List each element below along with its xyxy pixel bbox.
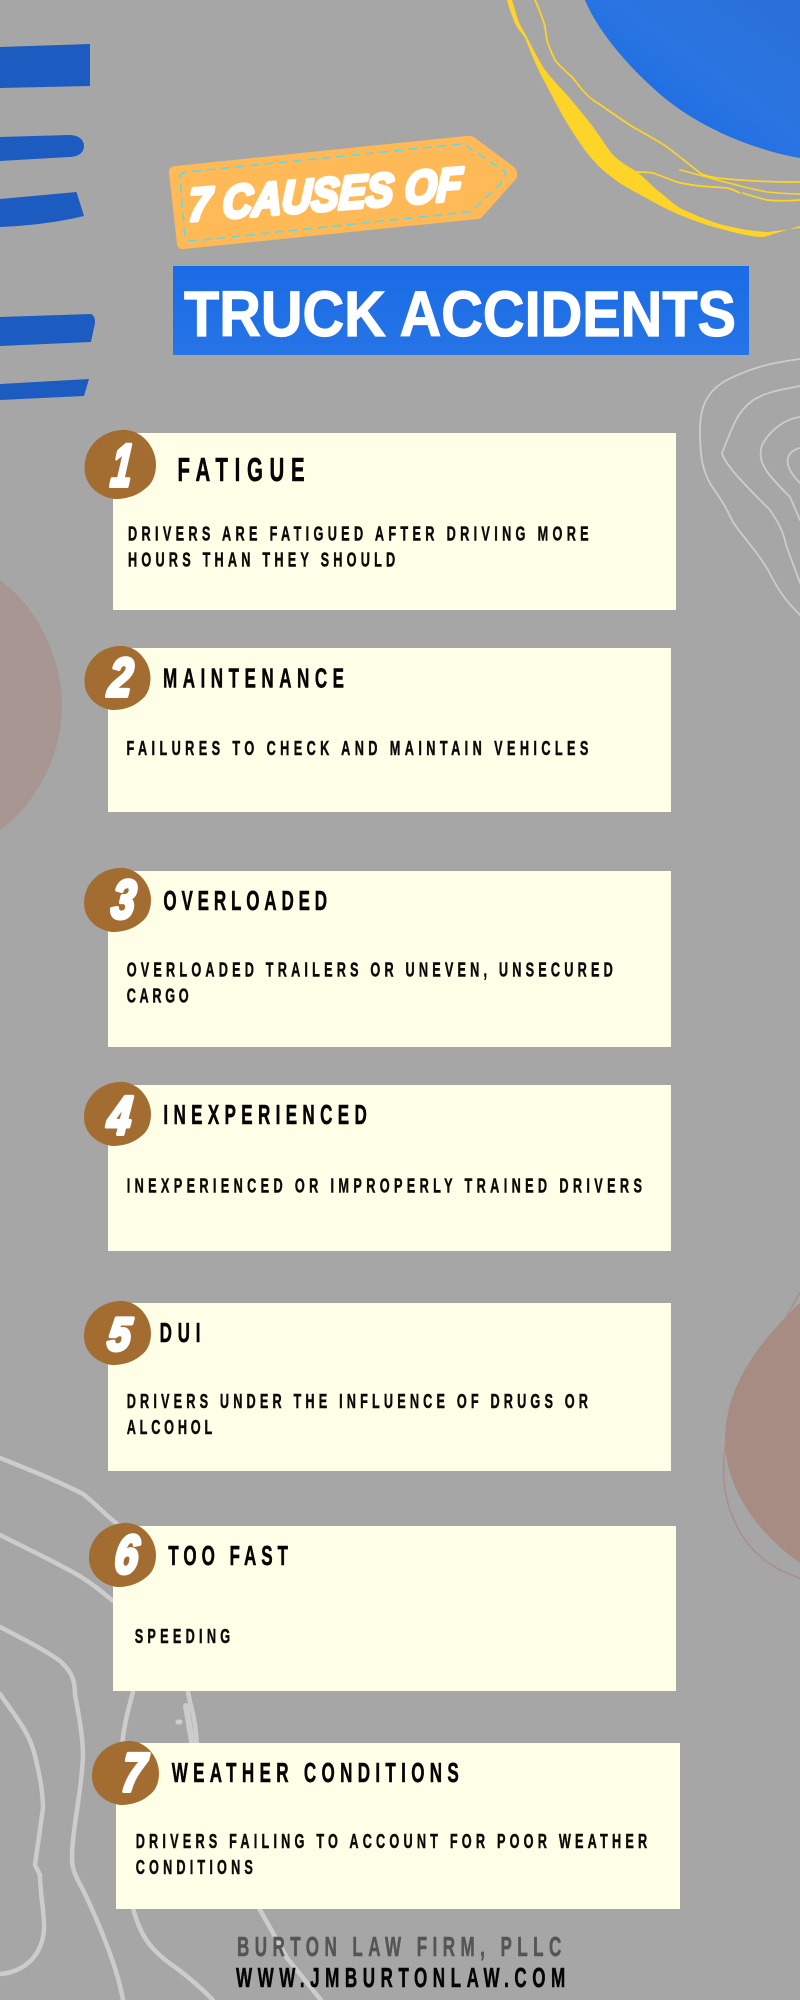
decorative blue strokes left [0,44,95,400]
badge 2 [84,646,150,710]
description: DRIVERS FAILING TO ACCOUNT FOR POOR WEATHER [136,1830,647,1853]
heading: DUI [160,1317,201,1348]
badge 3 [84,868,151,932]
badge 6 [89,1523,156,1587]
badge 2: 2 [105,648,136,708]
description: FAILURES TO CHECK AND MAINTAIN VEHICLES [126,737,588,760]
panel: cause 7 weather conditions [92,1741,680,1909]
tag: 7 causes of [169,136,517,249]
decorative yellow swoosh [507,0,800,237]
tag text: 7 CAUSES OF [188,157,465,231]
panel: cause 3 overloaded [84,868,671,1047]
panel: cause 6 too fast [89,1523,676,1691]
decorative contour lines bottom left [0,1458,321,2000]
decorative brown shape left [0,580,62,830]
description: CONDITIONS [136,1856,253,1879]
description: INEXPERIENCED OR IMPROPERLY TRAINED DRIVERS [127,1175,642,1198]
heading: FATIGUE [178,451,305,488]
description [136,1830,647,1879]
title banner [173,266,749,355]
heading: MAINTENANCE [163,662,344,694]
heading: TOO FAST [168,1540,288,1571]
description: CARGO [127,985,189,1008]
description: DRIVERS UNDER THE INFLUENCE OF DRUGS OR [127,1390,588,1413]
panel: cause 4 inexperienced [84,1082,671,1251]
badge 7: 7 [119,1743,150,1803]
panel: cause 5 DUI [84,1301,671,1471]
description [127,1390,588,1439]
description [128,523,589,572]
heading: OVERLOADED [163,885,327,916]
badge 1: 1 [108,432,136,499]
description: ALCOHOL [127,1416,212,1439]
footer [236,1931,565,1993]
badge 4: 4 [104,1086,135,1146]
badge 4 [84,1082,151,1146]
footer: BURTON LAW FIRM, PLLC [237,1931,561,1962]
description: SPEEDING [135,1625,230,1648]
decorative brown shape right [724,1292,800,1578]
badge 3: 3 [109,870,139,930]
decorative blue circle top right [585,0,800,158]
badge 1 [84,430,156,499]
panel: cause 2 maintenance [84,646,671,812]
decorative contour lines top right [700,359,800,615]
panel: cause 1 fatigue [84,430,676,610]
badge 7 [92,1741,159,1805]
heading: WEATHER CONDITIONS [172,1757,459,1788]
website: WWW.JMBURTONLAW.COM [236,1962,565,1993]
badge 5: 5 [106,1310,134,1361]
badge 5 [84,1301,151,1365]
badge 6: 6 [112,1525,143,1585]
description: HOURS THAN THEY SHOULD [128,549,395,572]
description: OVERLOADED TRAILERS OR UNEVEN, UNSECURED [127,959,613,982]
description [127,959,613,1008]
heading: INEXPERIENCED [163,1099,367,1130]
title text: TRUCK ACCIDENTS [184,278,736,350]
description: DRIVERS ARE FATIGUED AFTER DRIVING MORE [128,523,589,546]
